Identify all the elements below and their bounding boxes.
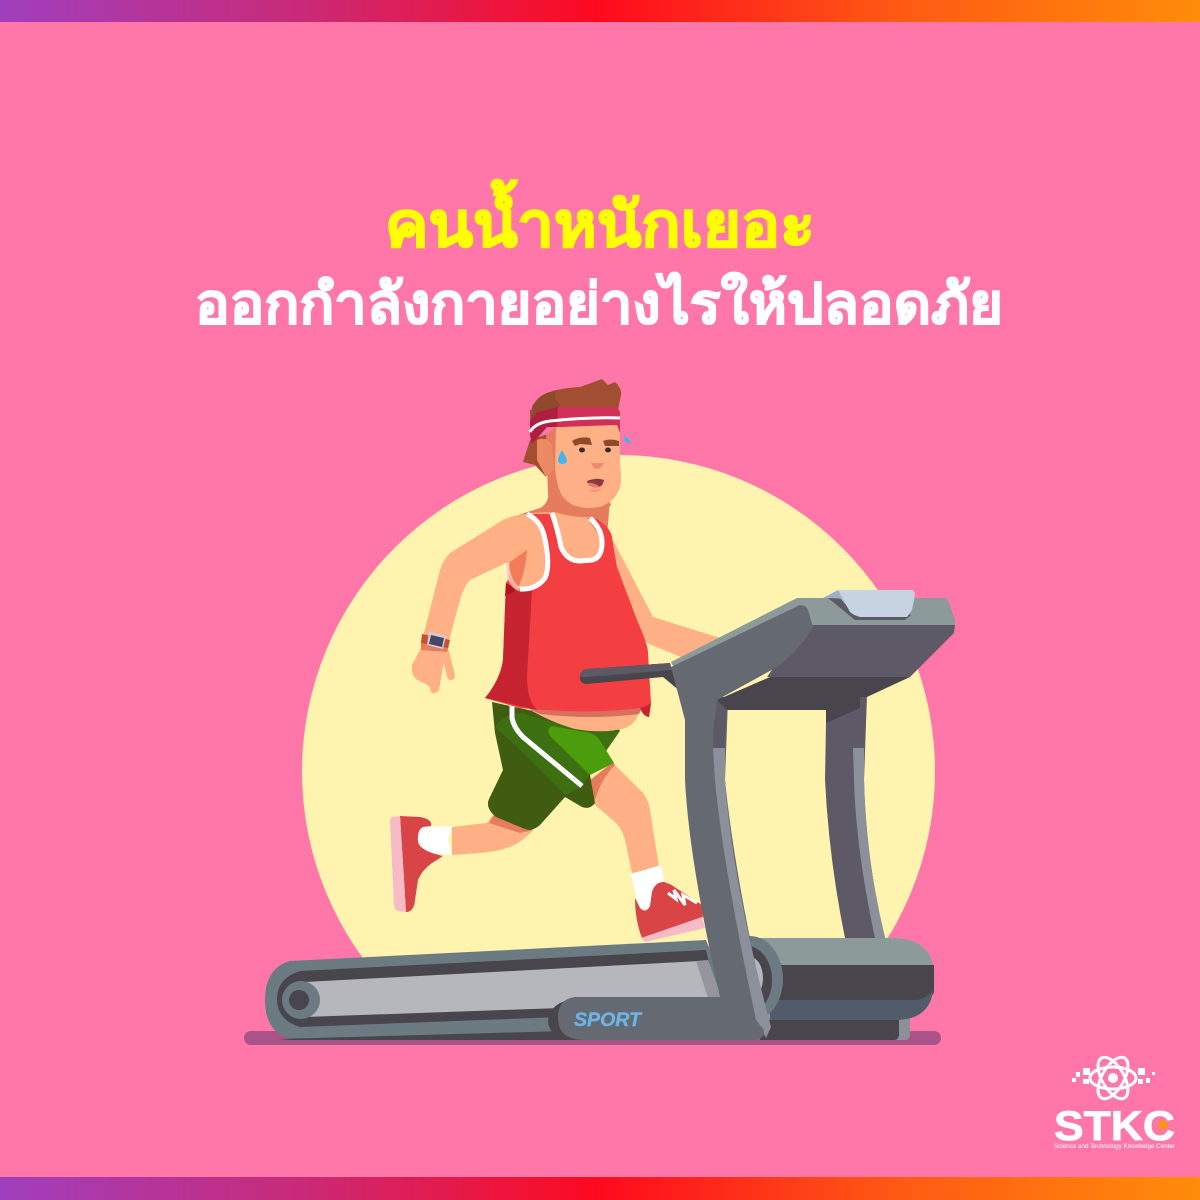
console xyxy=(671,590,955,723)
eyebrows xyxy=(572,437,619,446)
roller xyxy=(282,981,320,1019)
motor cover xyxy=(750,938,934,1040)
nose xyxy=(591,463,604,469)
hand xyxy=(412,648,446,693)
title xyxy=(195,179,1003,335)
back shoe xyxy=(400,816,443,912)
headband xyxy=(530,407,620,444)
hair back xyxy=(523,430,560,477)
hair xyxy=(530,379,621,423)
shorts xyxy=(488,702,620,830)
belly xyxy=(527,706,643,731)
wrist watch xyxy=(421,632,450,649)
neck trim xyxy=(552,513,602,561)
jaw shadow underlay xyxy=(546,425,575,505)
top gradient bar xyxy=(0,0,1200,22)
logo tagline: Science and Technology Knowledge Center xyxy=(1054,1144,1175,1150)
face xyxy=(555,425,621,510)
title line 1: คนน้ำหนักเยอะ xyxy=(385,179,815,260)
deck xyxy=(265,940,740,1040)
shoe laces xyxy=(668,890,697,905)
title line 2: ออกกำลังกายอย่างไรให้ปลอดภัย xyxy=(195,271,1003,335)
logo pixels xyxy=(1072,1068,1155,1084)
yellow circle backdrop xyxy=(302,455,935,958)
back pillar xyxy=(825,695,885,938)
atom icon xyxy=(1090,1053,1136,1103)
handlebar xyxy=(580,663,686,696)
back sock xyxy=(418,826,452,855)
near arm xyxy=(423,514,550,648)
neck xyxy=(503,470,610,560)
console screen xyxy=(823,590,915,620)
far arm xyxy=(613,540,720,665)
armpit shadow xyxy=(508,550,527,590)
logo xyxy=(1054,1053,1175,1150)
front pillar xyxy=(685,697,771,1038)
armhole trim xyxy=(520,514,548,589)
runner xyxy=(390,379,720,942)
bottom gradient bar xyxy=(0,1177,1200,1200)
front shoe xyxy=(635,882,703,938)
eyes xyxy=(579,448,585,452)
sweat drops xyxy=(558,450,567,464)
drive ring xyxy=(717,936,783,1022)
brand label: SPORT xyxy=(574,1010,642,1031)
logo wordmark: STKC xyxy=(1054,1102,1175,1149)
back leg xyxy=(390,813,533,912)
logo dot xyxy=(1158,1120,1168,1130)
ear xyxy=(537,439,554,477)
front sock xyxy=(631,865,665,910)
SPORT foot xyxy=(548,997,764,1040)
head xyxy=(523,379,630,517)
floor shadow xyxy=(244,1031,941,1045)
tank top xyxy=(485,514,651,717)
mouth xyxy=(587,479,604,487)
treadmill xyxy=(265,590,955,1040)
front leg xyxy=(580,762,705,942)
shorts stripe xyxy=(512,706,582,786)
headband stripe xyxy=(530,418,620,432)
